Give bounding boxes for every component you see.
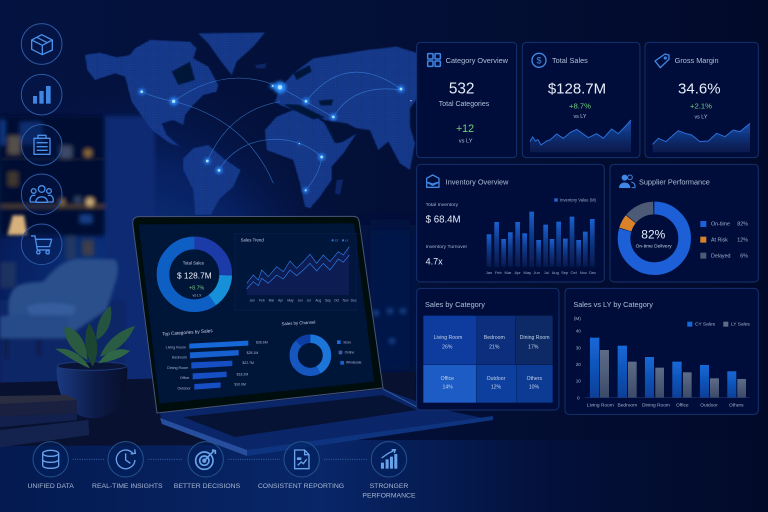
metric: gross margin change (690, 102, 712, 120)
chart: inventory bars (486, 197, 597, 275)
chart: inventory bars: Sep (561, 270, 569, 275)
screen: top categories bars: $36.6M (256, 341, 268, 345)
screen: top categories bars: Top Categories by Sales (162, 328, 213, 337)
screen: top categories bars: Office (180, 376, 189, 380)
laptop base (160, 389, 493, 456)
metric: gross margin change: vs LY (695, 114, 708, 120)
screen: sales donut: $ 128.7M (177, 270, 212, 280)
chart: treemap: 10% (529, 385, 540, 391)
legend: delivery status: Delayed (711, 253, 731, 259)
legend: CY and LY sales: CY Sales (695, 322, 716, 328)
icon: shopping cart (21, 224, 62, 265)
screen: sales trend: Jul (307, 298, 311, 302)
metric: total categories (439, 80, 490, 108)
screen: sales donut: +8.7% (189, 285, 205, 291)
chart: treemap: Dining Room (520, 335, 550, 341)
legend: delivery status: 12% (737, 237, 748, 243)
screen: top categories bars: Bedroom (172, 356, 187, 360)
screen: sales trend: CY (335, 238, 339, 242)
chart: inventory bars: Oct (571, 270, 578, 275)
screen: top categories bars: Living Room (166, 345, 186, 349)
metric: total inventory (426, 202, 461, 226)
benefit: consistent reporting (258, 442, 344, 490)
chart: inventory bars: Jun (533, 270, 540, 275)
armchair (0, 259, 118, 358)
screen: sales by channel (281, 320, 362, 372)
legend: delivery status: 6% (740, 253, 748, 259)
benefit: consistent reporting: CONSISTENT REPORTING (258, 483, 344, 490)
chart: grouped bars: 40 (576, 328, 581, 333)
screen: sales trend: Dec (351, 298, 357, 302)
screen: sales trend: Mar (269, 298, 275, 302)
chart: treemap: Outdoor (487, 376, 506, 382)
legend: delivery status: At Risk (711, 237, 728, 243)
screen: sales trend: Sales Trend (241, 237, 264, 242)
metric: category change: vs LY (459, 138, 473, 144)
benefit: real-time insights (92, 442, 163, 490)
chart: inventory bars: Feb (495, 270, 503, 275)
chart: inventory bars: May (524, 270, 531, 275)
heading: total sales: Total Sales (552, 56, 588, 65)
benefit: stronger performance (362, 442, 416, 499)
chart: treemap: Bedroom (484, 335, 505, 341)
laptop screen (133, 216, 383, 413)
metric: total sales change (569, 101, 591, 120)
chart: grouped bars (574, 316, 750, 408)
screen: top categories bars: $28.1M (247, 351, 258, 355)
chart: treemap: Others (527, 376, 542, 382)
chart: grouped bars: 0 (577, 395, 580, 400)
chart: inventory bars: Dec (589, 270, 596, 275)
metric: total inventory: $ 68.4M (426, 215, 461, 226)
glowing city nodes (139, 81, 412, 193)
chart: on-time delivery donut (624, 208, 685, 269)
metric: inventory turnover: 4.7x (426, 256, 443, 266)
icon: people (21, 174, 62, 215)
plant leaves (55, 306, 135, 368)
icon: bar chart (21, 74, 62, 115)
benefit: better decisions: BETTER DECISIONS (174, 483, 241, 490)
legend: delivery status: 82% (737, 222, 748, 228)
screen: sales trend: Oct (334, 298, 339, 302)
metric: category change (456, 123, 474, 144)
chart: inventory bars: Nov (580, 270, 587, 275)
screen: sales trend (235, 233, 357, 310)
screen: sales by channel: Store (343, 341, 351, 345)
chart: grouped bars: Others (729, 402, 744, 408)
heading: supplier performance: Supplier Performance (639, 177, 710, 186)
heading: category overview: Category Overview (446, 56, 509, 65)
chart: grouped bars: Office (676, 402, 689, 408)
icon: dollar coin: $ (536, 56, 541, 66)
icon: suppliers (619, 175, 635, 188)
panel: gross margin (645, 42, 758, 158)
metric: gross margin change: +2.1% (690, 102, 712, 111)
chart: treemap: 21% (489, 344, 500, 350)
chart: grouped bars: 10 (576, 379, 581, 384)
screen: sales donut: vs LY (193, 294, 202, 298)
plant pot (57, 362, 127, 418)
chart: treemap: 17% (528, 344, 539, 350)
panel: category overview (417, 42, 517, 158)
chart: treemap: Office (441, 376, 454, 382)
books (0, 395, 89, 447)
panel: supplier performance (610, 164, 758, 282)
chart: grouped bars: Outdoor (700, 402, 718, 408)
chart: grouped bars: Living Room (587, 402, 614, 408)
lamp (7, 215, 27, 235)
metric: total inventory: Total Inventory (426, 202, 459, 208)
benefit: unified data (27, 442, 74, 490)
chart: grouped bars: 30 (576, 345, 581, 350)
icon: inventory box (427, 175, 439, 187)
screen: sales donut: Total Sales (183, 261, 204, 266)
chart: treemap: 26% (442, 344, 453, 350)
chart: grouped bars: (M) (574, 316, 581, 321)
screen: sales trend: Nov (343, 298, 349, 302)
chart: gross margin sparkline (653, 123, 750, 152)
chart: treemap (423, 316, 553, 403)
screen: top categories bars: $10.9M (234, 382, 246, 386)
connector dots (73, 458, 367, 461)
chart: grouped bars: Bedroom (618, 402, 637, 408)
desk (0, 372, 415, 446)
metric: total categories: 532 (449, 80, 474, 97)
screen: sales trend: Apr (278, 298, 284, 302)
screen: sales by channel: Wholesale (346, 361, 362, 365)
screen: sales by channel: Online (345, 351, 354, 355)
screen: top categories bars: Outdoor (177, 386, 191, 390)
screen: sales trend: Aug (315, 298, 321, 302)
screen: top categories bars (162, 328, 268, 390)
metric: total sales value: $128.7M (548, 80, 606, 97)
left icon column (21, 24, 62, 265)
heading: sales by category: Sales by Category (425, 300, 485, 309)
screen: sales trend: Jun (298, 298, 303, 302)
blurred room scene (0, 116, 415, 447)
connection arcs (142, 72, 401, 190)
chart: treemap: Living Room (434, 335, 462, 341)
metric: total sales change: vs LY (574, 114, 587, 120)
panel: sales by category (417, 288, 559, 410)
heading: sales vs LY: Sales vs LY by Category (573, 300, 653, 309)
panel: inventory overview (417, 164, 604, 282)
metric: gross margin value: 34.6% (678, 80, 721, 97)
metric: total sales change: +8.7% (569, 101, 591, 110)
benefit: real-time insights: REAL-TIME INSIGHTS (92, 483, 163, 490)
metric: category change: +12 (456, 123, 474, 135)
chart: inventory bars: Inventory Value (M) (560, 197, 597, 202)
chart: inventory bars: Mar (505, 270, 512, 275)
chart: inventory bars: Jul (544, 270, 549, 275)
world map with connections (85, 33, 418, 215)
heading: gross margin: Gross Margin (675, 56, 719, 65)
legend: delivery status: On-time (711, 222, 730, 228)
heading: inventory overview: Inventory Overview (446, 177, 509, 186)
screen: sales trend: Jan (249, 298, 255, 302)
screen: sales trend: LY (345, 238, 349, 242)
laptop (133, 216, 493, 456)
panel: total sales (522, 42, 640, 158)
chart: inventory bars: Jan (486, 270, 492, 275)
benefit: stronger performance: PERFORMANCE (362, 492, 416, 499)
chart: grouped bars: 20 (576, 362, 581, 367)
panel: sales vs LY by category (565, 288, 758, 414)
icon: box (21, 24, 62, 64)
legend: CY and LY sales (687, 322, 750, 328)
benefit: stronger performance: STRONGER (370, 483, 408, 490)
screen: top categories bars: $18.2M (237, 372, 248, 376)
screen: sales trend: Sep (325, 298, 331, 302)
legend: CY and LY sales: LY Sales (731, 322, 750, 328)
metric: inventory turnover: Inventory Turnover (426, 244, 468, 250)
chart: treemap: 12% (491, 385, 502, 391)
benefit: unified data: UNIFIED DATA (27, 483, 74, 490)
metric: inventory turnover (426, 244, 468, 266)
chart: total sales sparkline (530, 120, 631, 152)
legend: delivery status (700, 221, 748, 259)
benefit: better decisions (174, 442, 241, 490)
chart: treemap: 14% (442, 385, 453, 391)
metric: total categories: Total Categories (439, 101, 490, 108)
screen: top categories bars: $22.7M (242, 361, 254, 365)
icon: price tag (655, 54, 669, 68)
chart: on-time delivery donut: 82% (641, 228, 666, 242)
chart: inventory bars: Apr (515, 270, 521, 275)
screen: top categories bars: Dining Room (167, 366, 188, 370)
screen: sales trend: May (287, 298, 294, 302)
screen: sales by channel: Sales by Channel (281, 320, 316, 326)
chart: on-time delivery donut: On-time Delivery (636, 243, 672, 249)
icon: grid (428, 54, 440, 66)
screen: sales trend: Feb (259, 298, 265, 302)
chart: inventory bars: Aug (552, 270, 559, 275)
chart: grouped bars: Dining Room (642, 402, 670, 408)
screen: sales donut (163, 243, 226, 306)
icon: clipboard (21, 125, 62, 165)
benefits row (27, 442, 416, 499)
